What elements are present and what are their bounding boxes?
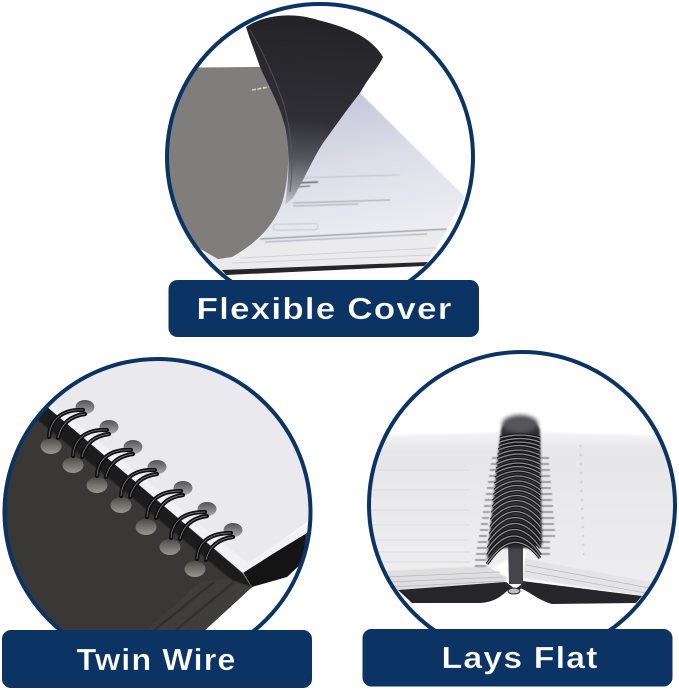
punched holes in paper (76, 400, 242, 537)
page stack lines (232, 248, 436, 263)
spine (506, 546, 523, 594)
label: Lays Flat (362, 629, 672, 686)
left page fine lines (372, 470, 504, 587)
right page edge stack (523, 558, 655, 596)
wire coil body (487, 419, 542, 560)
grey front cover (169, 67, 288, 259)
fold lines on cover (205, 586, 252, 630)
panel: lays flat (360, 352, 679, 686)
circle outline (167, 4, 473, 310)
right dark shadow cover (243, 533, 307, 587)
wire coil loops dark (487, 435, 540, 564)
right cover (520, 581, 642, 604)
wire highlights (49, 410, 233, 560)
label: Flexible Cover (168, 280, 479, 337)
flap edge highlight (250, 30, 292, 192)
label: Flexible Cover: Flexible Cover (196, 291, 452, 326)
circle outline (369, 352, 675, 658)
paper block edge (46, 402, 310, 573)
paper top sheet (50, 360, 320, 564)
label: Lays Flat: Lays Flat (442, 640, 598, 675)
notebook paper (200, 93, 465, 270)
photo: twin wire binding (6, 361, 308, 630)
curled dark inner flap (246, 15, 383, 205)
label: Twin Wire: Twin Wire (76, 642, 236, 677)
page stack edge (214, 230, 447, 272)
left pages (371, 433, 508, 570)
dark back cover strip (222, 262, 428, 275)
left cover (398, 582, 510, 603)
coil blurred top (502, 415, 538, 433)
wire coil loop highlights (487, 435, 540, 564)
photo: notebook with cover being flexed (169, 15, 465, 275)
black cover (6, 414, 252, 630)
right pages (525, 432, 679, 590)
right page fine lines (525, 445, 650, 593)
label: Twin Wire (2, 630, 312, 688)
panel: twin wire (0, 359, 320, 688)
dark spine strip (38, 405, 252, 587)
left page edge stack (380, 566, 508, 591)
punched holes in cover (40, 438, 206, 577)
wire loops (49, 410, 233, 560)
small print on page (260, 175, 447, 242)
circle outline (4, 359, 310, 665)
photo: open notebook lying flat (360, 415, 679, 604)
gold lettering on cover (252, 87, 269, 90)
comb teeth (475, 458, 555, 566)
panel: flexible cover (130, 4, 479, 337)
